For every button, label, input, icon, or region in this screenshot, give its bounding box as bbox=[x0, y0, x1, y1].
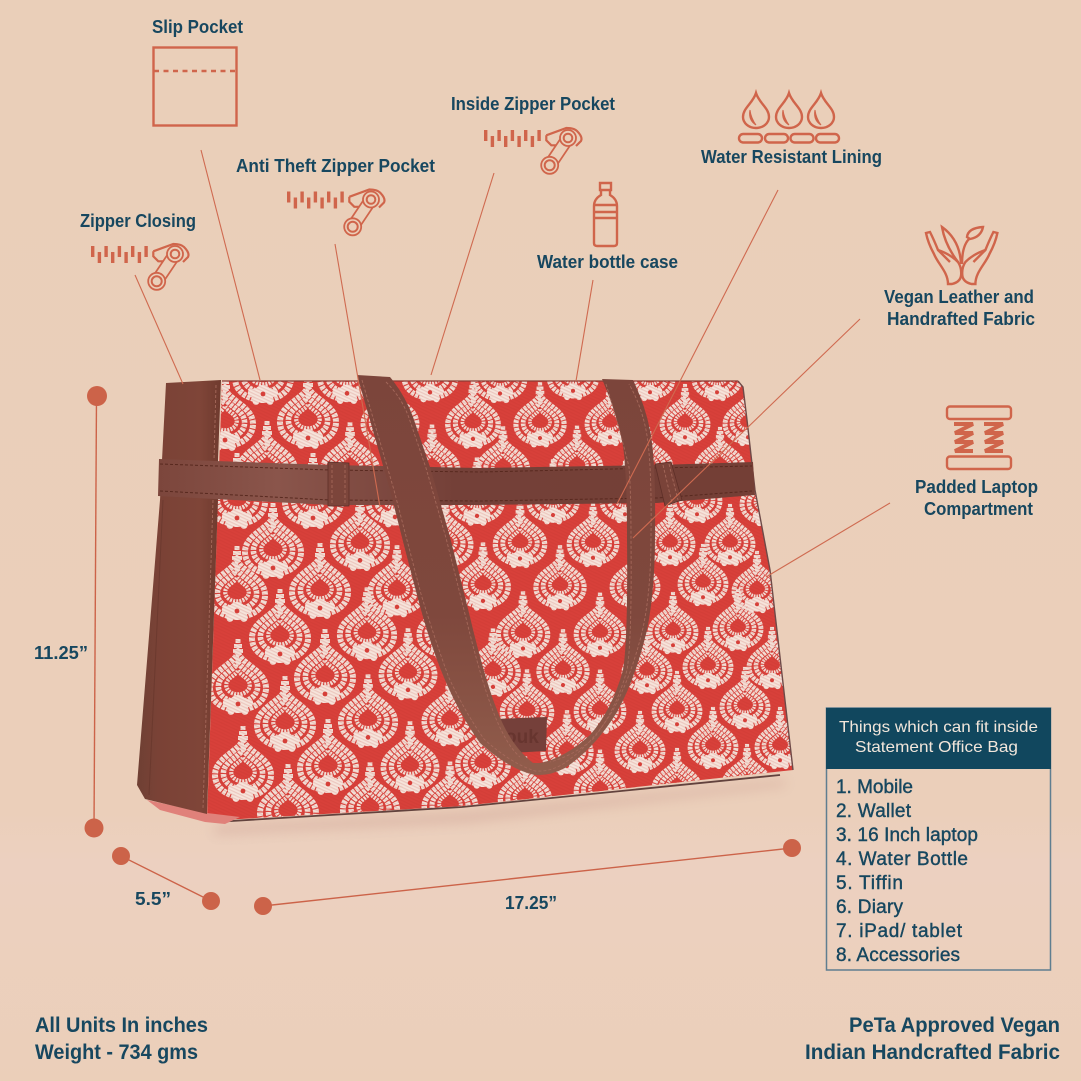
heading: anti theft zipper pocket: Anti Theft Zipper Pocket bbox=[236, 156, 435, 176]
dimension: width: 17.25” bbox=[505, 893, 557, 913]
fabric panel bbox=[207, 382, 792, 820]
list of items: 5. Tiffin bbox=[836, 873, 903, 894]
front belt bbox=[158, 459, 755, 506]
shoulder strap bbox=[357, 375, 655, 775]
icon: zipper anti theft bbox=[287, 190, 384, 235]
icon: water drops bbox=[739, 93, 839, 142]
dimension: height bbox=[34, 386, 107, 838]
leader line: water resistant lining bbox=[617, 190, 778, 504]
list of items: 1. Mobile bbox=[836, 777, 913, 798]
icon: zipper inside bbox=[484, 128, 582, 174]
brand patch bbox=[497, 717, 547, 753]
leader line: water bottle case bbox=[576, 280, 593, 381]
heading: vegan leather and handcrafted fabric: Handrafted Fabric bbox=[887, 309, 1035, 329]
fabric right edge bbox=[738, 381, 793, 770]
leader line: anti theft zipper pocket bbox=[335, 244, 380, 507]
heading: vegan leather and handcrafted fabric bbox=[884, 287, 1035, 329]
list of items: 3. 16 Inch laptop bbox=[836, 825, 978, 846]
left belt loop bbox=[328, 462, 349, 506]
list of items: 6. Diary bbox=[836, 897, 904, 918]
leader line: inside zipper pocket bbox=[431, 173, 494, 375]
heading: vegan leather and handcrafted fabric: Vegan Leather and bbox=[884, 287, 1034, 307]
list of items: 7. iPad/ tablet bbox=[836, 921, 963, 942]
bag illustration bbox=[137, 375, 794, 835]
footer right: certification: PeTa Approved Vegan bbox=[849, 1013, 1060, 1037]
heading: water resistant lining: Water Resistant Lining bbox=[701, 147, 882, 167]
heading: inside zipper pocket: Inside Zipper Pocket bbox=[451, 94, 615, 114]
heading: padded laptop compartment bbox=[915, 477, 1038, 519]
dimension: width bbox=[254, 839, 801, 915]
panel: things which can fit inside bbox=[826, 708, 1051, 970]
underside sliver bbox=[147, 800, 240, 824]
icon: water bottle bbox=[594, 183, 617, 246]
footer right: certification bbox=[805, 1013, 1060, 1064]
right belt loop bbox=[655, 462, 682, 506]
list of items: 4. Water Bottle bbox=[836, 849, 968, 870]
list of items: 8. Accessories bbox=[836, 945, 960, 966]
list of items bbox=[836, 777, 978, 966]
dimension: height: 11.25” bbox=[34, 643, 88, 663]
panel: things which can fit inside: Statement Office Bag bbox=[855, 739, 1018, 756]
list of items: 2. Wallet bbox=[836, 801, 912, 822]
dimension: depth bbox=[112, 847, 220, 910]
footer right: certification: Indian Handcrafted Fabric bbox=[805, 1040, 1060, 1064]
leader line: vegan leather bbox=[633, 319, 860, 538]
leader line: slip pocket bbox=[201, 150, 260, 380]
heading: padded laptop compartment: Compartment bbox=[924, 499, 1033, 519]
dimension: depth: 5.5” bbox=[135, 889, 171, 909]
footer left: units and weight: Weight - 734 gms bbox=[35, 1040, 198, 1064]
icon: slip pocket bbox=[154, 48, 236, 126]
bottom dark edge bbox=[215, 775, 780, 822]
footer left: units and weight: All Units In inches bbox=[35, 1013, 208, 1037]
footer left: units and weight bbox=[35, 1013, 208, 1064]
heading: slip pocket: Slip Pocket bbox=[152, 17, 243, 37]
ground shadow bbox=[215, 780, 785, 834]
heading: padded laptop compartment: Padded Laptop bbox=[915, 477, 1038, 497]
brand patch: ouk bbox=[505, 727, 539, 748]
left leather panel bbox=[137, 380, 221, 814]
heading: zipper closing: Zipper Closing bbox=[80, 211, 196, 231]
icon: padded springs bbox=[947, 406, 1011, 469]
icon: hands and leaves bbox=[926, 227, 997, 284]
fabric top edge bbox=[222, 380, 738, 382]
icon: zipper closing bbox=[91, 244, 188, 290]
leader line: zipper closing bbox=[135, 275, 183, 384]
panel: things which can fit inside: Things which can fit inside bbox=[839, 719, 1038, 736]
panel header bbox=[826, 708, 1051, 769]
heading: water bottle case: Water bottle case bbox=[537, 252, 678, 272]
leader line: padded laptop compartment bbox=[766, 503, 890, 577]
